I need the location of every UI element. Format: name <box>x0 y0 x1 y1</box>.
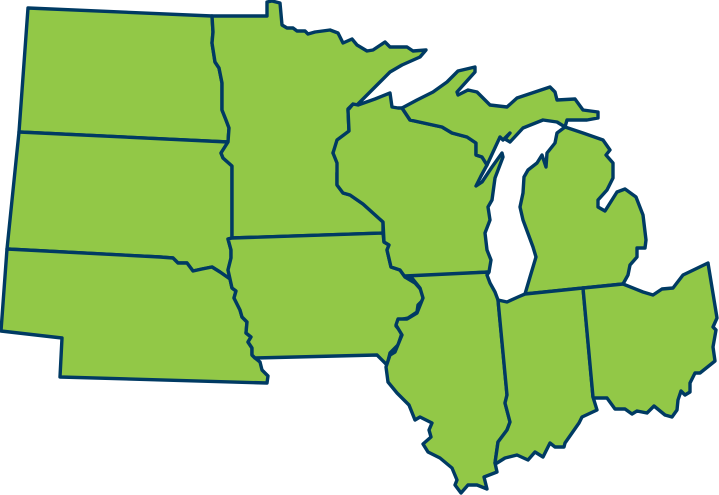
state: South Dakota <box>7 132 232 279</box>
state: Illinois <box>386 272 510 493</box>
state: Wisconsin <box>333 93 503 277</box>
state: Michigan upper peninsula <box>402 67 598 165</box>
state: Minnesota <box>212 1 426 238</box>
state: North Dakota <box>19 8 229 142</box>
state: Iowa <box>228 233 423 365</box>
state: Indiana <box>495 288 597 463</box>
state: Nebraska <box>1 249 268 383</box>
state: Michigan lower peninsula <box>520 127 646 294</box>
state: Ohio <box>583 263 717 417</box>
